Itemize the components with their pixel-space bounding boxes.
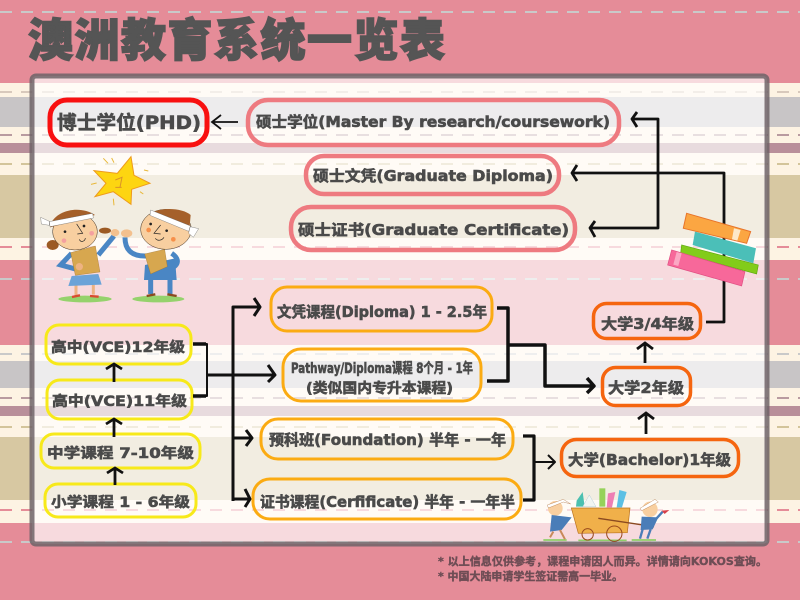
box: university year 1: [562, 440, 738, 476]
box: primary: 小学课程 1 - 6年级: [51, 494, 190, 511]
box: Graduate Certificate: [291, 207, 575, 250]
box: Foundation: [261, 419, 513, 459]
box: Foundation: 预科班(Foundation) 半年 - 一年: [269, 431, 506, 449]
box: PHD: [50, 100, 207, 145]
title: 澳洲教育系统一览表: [28, 4, 445, 69]
box: university year 3/4: 大学3/4年级: [601, 315, 694, 333]
arrow: university 3/4 to graduate diploma: [572, 165, 724, 322]
footnotes: * 中国大陆申请学生签证需高一毕业。: [438, 569, 623, 583]
box: Pathway: Pathway/Diploma课程 8个月 - 1年: [291, 360, 473, 377]
icon: star: [91, 157, 150, 205]
box: VCE year 11: [47, 380, 192, 419]
box: Master: [248, 100, 619, 145]
arrows: bachelor degree to master and certificate: [590, 112, 658, 237]
box: Certificate: [253, 479, 521, 519]
box: Diploma: [271, 287, 492, 331]
box: VCE year 11: 高中(VCE)11年级: [52, 393, 187, 410]
box: university year 2: [602, 368, 690, 406]
box: university year 1: 大学(Bachelor)1年级: [568, 451, 731, 469]
arrows: foundation and certificate to bachelor: [523, 436, 555, 500]
box: Certificate: 证书课程(Cerfificate) 半年 - 一年半: [260, 493, 515, 511]
box: PHD: 博士学位(PHD): [57, 111, 201, 134]
illustration: two students: [41, 209, 199, 302]
arrows: diploma and pathway to university year 2: [487, 308, 594, 393]
arrows: upward progression: [106, 343, 654, 485]
illustration: stack of books: [668, 213, 758, 286]
arrow: master to PHD: [212, 115, 238, 129]
box: Diploma: 文凭课程(Diploma) 1 - 2.5年: [277, 303, 487, 321]
box: Master: 硕士学位(Master By research/coursework): [256, 113, 610, 131]
box: Graduate Diploma: [306, 156, 559, 194]
box: secondary: [41, 434, 200, 468]
footnotes: * 以上信息仅供参考，课程申请因人而异。详情请向KOKOS查询。: [438, 554, 767, 568]
box: secondary: 中学课程 7-10年级: [47, 445, 194, 462]
box: Graduate Diploma: 硕士文凭(Graduate Diploma): [313, 167, 553, 185]
arrows: VCE to pathways: [193, 298, 275, 507]
girl: [41, 210, 119, 302]
box: university year 3/4: [594, 304, 700, 338]
box: primary: [45, 484, 196, 517]
main panel: [32, 76, 767, 544]
box: Pathway: (类似国内专升本课程): [306, 380, 453, 397]
box: VCE year 12: 高中(VCE)12年级: [51, 339, 185, 356]
box: university year 2: 大学2年级: [608, 379, 684, 397]
footnotes: [438, 554, 767, 583]
box: Graduate Certificate: 硕士证书(Graduate Certificate): [298, 221, 569, 239]
boy: [121, 209, 199, 302]
box: VCE year 12: [46, 325, 191, 364]
box: Pathway: [283, 349, 481, 401]
illustration: children pulling book cart: [543, 488, 669, 541]
